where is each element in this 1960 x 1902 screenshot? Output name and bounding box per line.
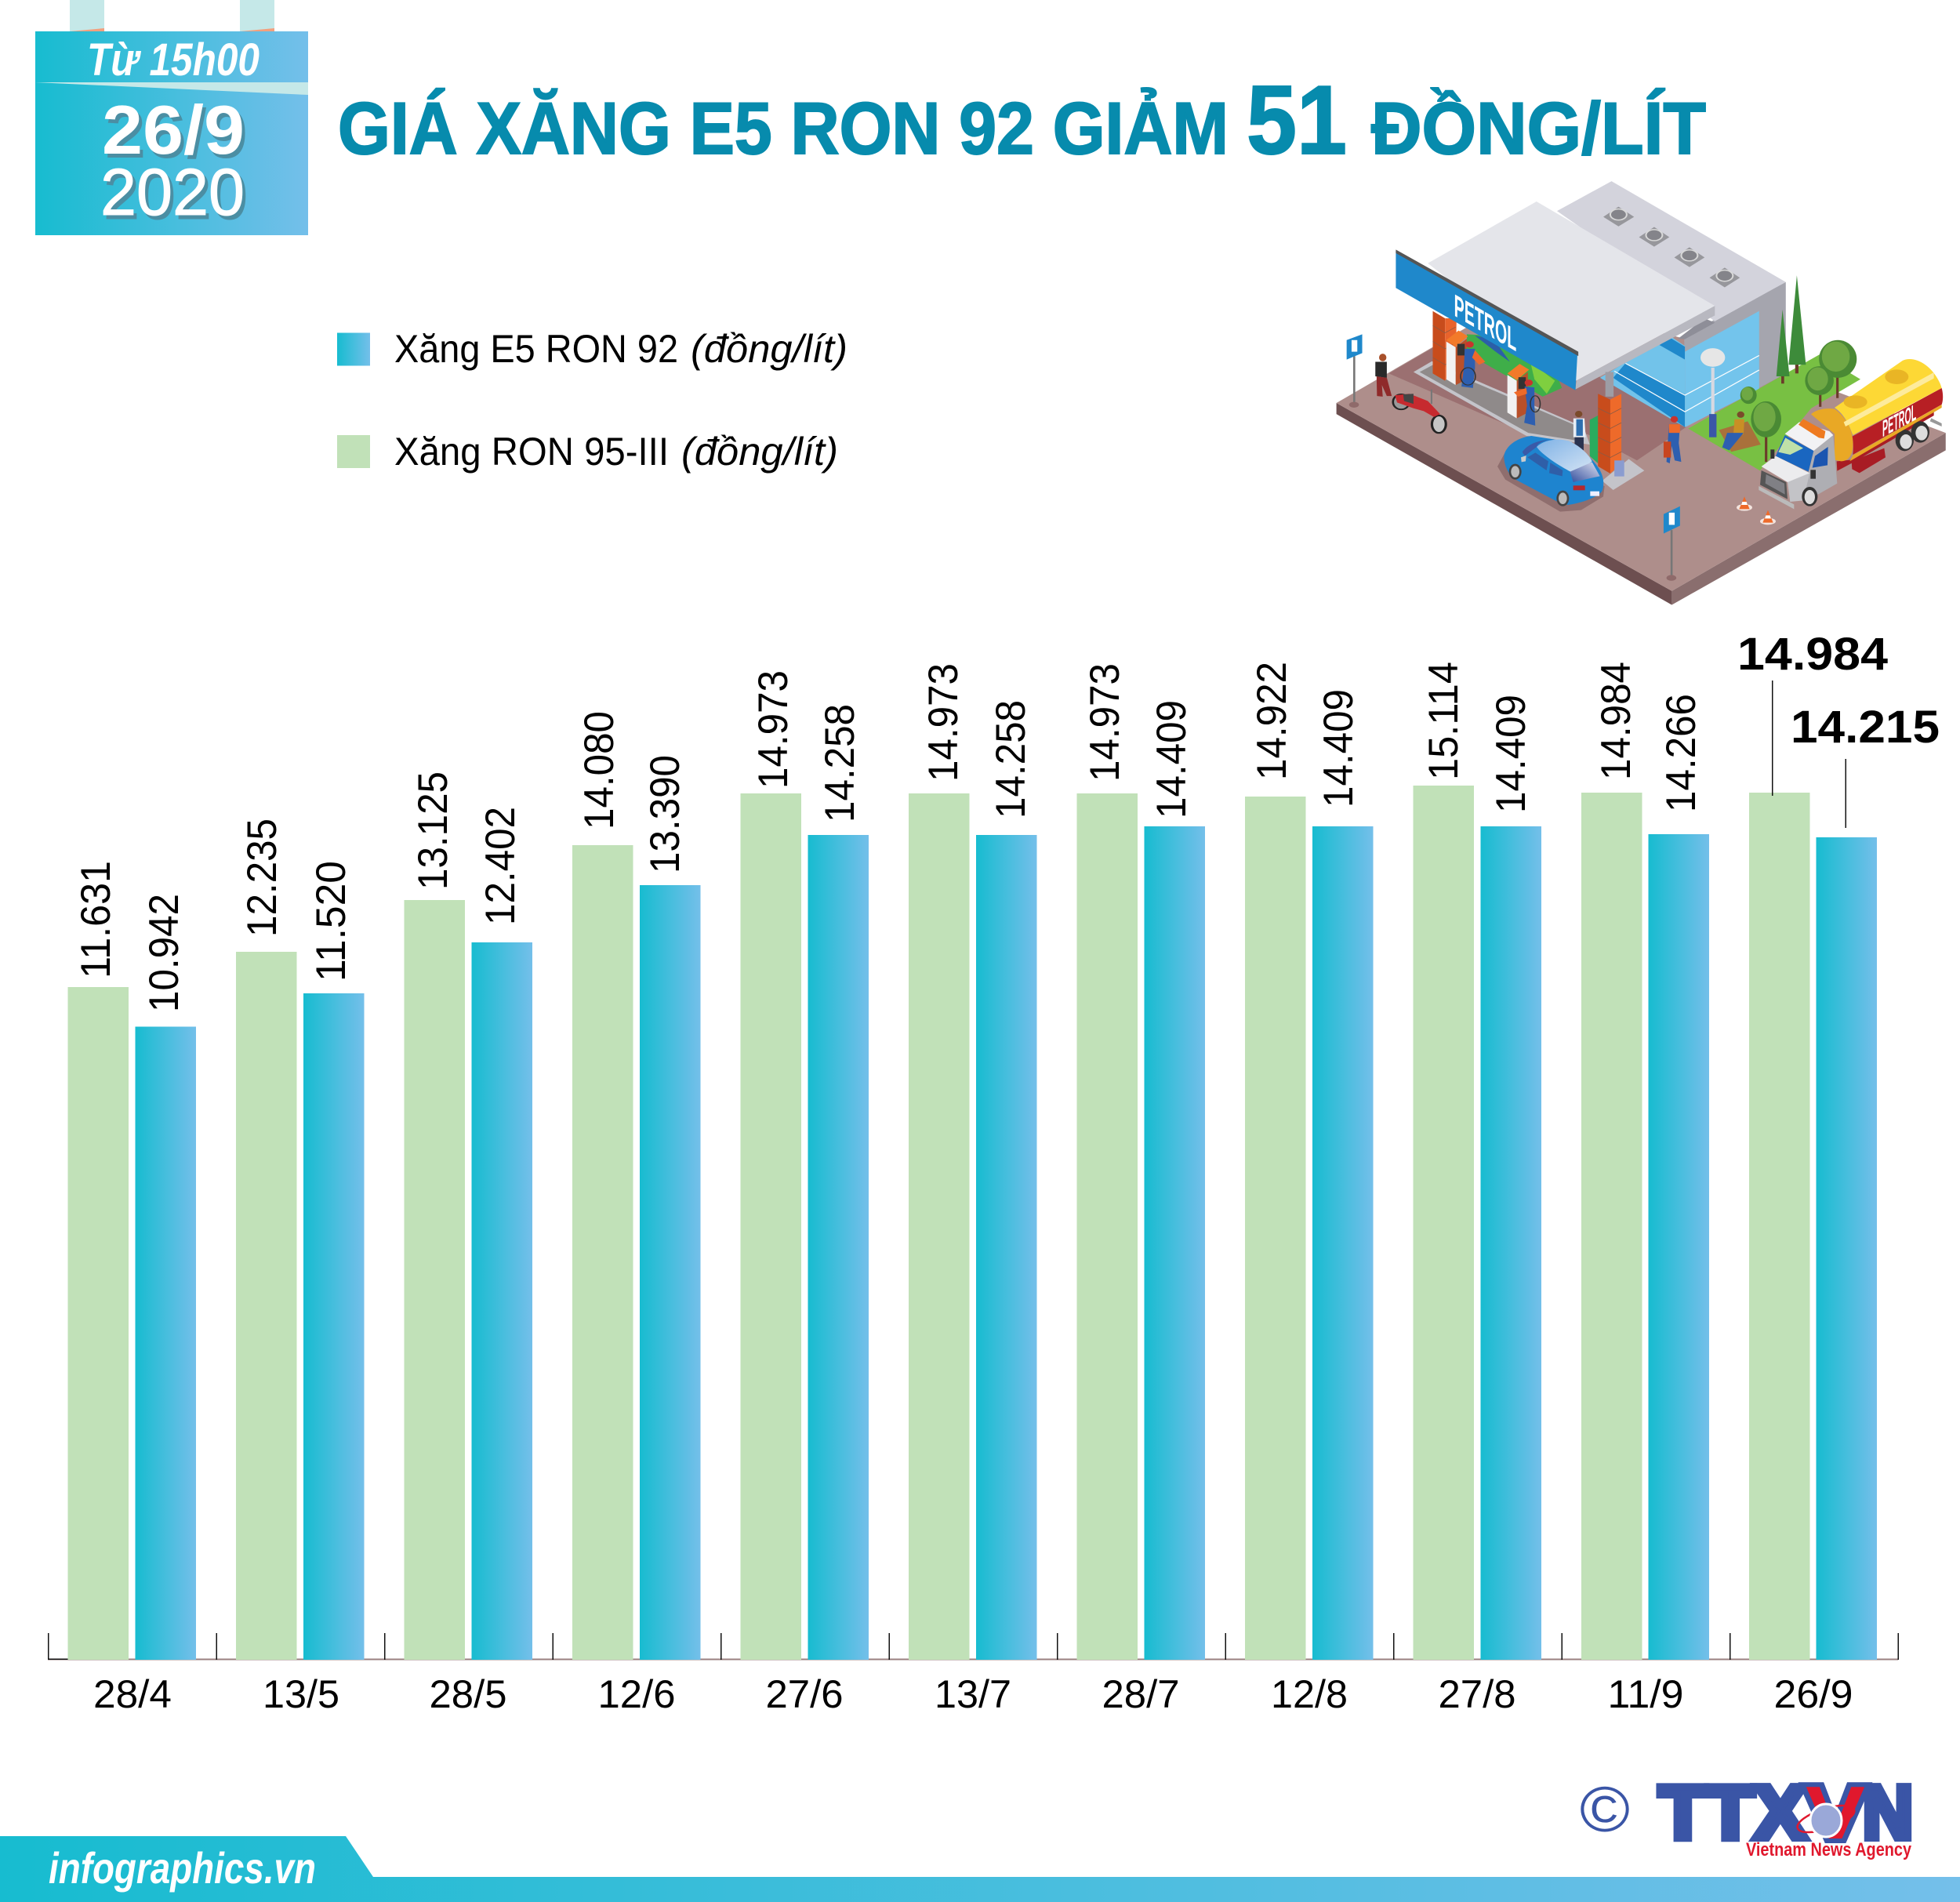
lawn	[1688, 354, 1860, 470]
logo: TTXVN: Vietnam News Agency	[1746, 1839, 1912, 1860]
date badge	[35, 0, 308, 235]
group 12/6	[572, 711, 701, 1716]
group 11/9: 11/9	[1607, 1672, 1684, 1716]
group 13/7	[909, 663, 1036, 1716]
fuel pump 2	[1508, 364, 1529, 419]
copyright symbol: ©	[1580, 1774, 1630, 1846]
group 12/8: 12/8	[1271, 1672, 1348, 1716]
group 28/7: 14.973	[1082, 663, 1128, 782]
group 12/6: 13.390	[642, 755, 688, 873]
title: ĐỒNG/LÍT	[1371, 87, 1706, 169]
person on bench	[1719, 412, 1761, 452]
footer band	[0, 1836, 1960, 1902]
chart axis	[48, 1633, 1899, 1661]
group 12/8: 14.409	[1316, 689, 1362, 808]
date badge: 2020	[100, 155, 245, 229]
group 11/9: 14.266	[1658, 694, 1704, 812]
pillar right	[1590, 372, 1624, 477]
building	[1557, 181, 1786, 427]
group 27/8: 14.409	[1488, 695, 1534, 813]
legend: (đồng/lít)	[691, 327, 848, 371]
group 28/5: 28/5	[430, 1672, 506, 1716]
group 28/5: 13.125	[410, 771, 456, 890]
callout: 14.215: 14.215	[1791, 702, 1940, 753]
trees	[1740, 275, 1857, 462]
canopy	[1396, 201, 1715, 390]
group 11/9	[1581, 662, 1709, 1716]
callout: 14.984: 14.984	[1737, 629, 1888, 680]
group 27/8: 15.114	[1421, 662, 1467, 780]
group 28/7: 14.409	[1149, 700, 1195, 819]
group 27/8	[1413, 662, 1541, 1716]
group 27/6: 27/6	[765, 1672, 844, 1716]
group 28/5	[405, 771, 532, 1716]
group 28/4	[67, 861, 196, 1716]
group 26/9: 26/9	[1773, 1672, 1853, 1716]
motorcycle	[1393, 390, 1446, 433]
group 28/4: 28/4	[93, 1672, 172, 1716]
logo: TTXVN: N	[1863, 1770, 1913, 1855]
fuel pump 1	[1446, 331, 1468, 385]
green car	[1467, 334, 1562, 397]
man beside car	[1573, 411, 1586, 450]
legend	[337, 327, 848, 474]
group 26/9	[1749, 793, 1877, 1716]
group 13/5	[236, 819, 364, 1716]
legend: Xăng E5 RON 92	[394, 327, 678, 371]
attendant 1	[1461, 341, 1485, 388]
group 13/7: 13/7	[935, 1672, 1011, 1716]
road sign left	[1347, 334, 1363, 408]
title	[338, 67, 1706, 175]
blue car	[1497, 436, 1605, 512]
group 12/8	[1245, 662, 1374, 1716]
group 12/8: 14.922	[1249, 662, 1295, 780]
group 13/7: 14.973	[920, 663, 967, 782]
group 28/5: 12.402	[477, 807, 524, 925]
footer text: infographics.vn	[49, 1843, 316, 1893]
group 28/7: 28/7	[1102, 1672, 1179, 1716]
canopy: PETROL	[1454, 288, 1516, 358]
group 27/6: 14.258	[817, 704, 863, 822]
illustration: petrol station	[1337, 181, 1946, 605]
platform	[1337, 295, 1946, 605]
attendant 2	[1514, 379, 1541, 426]
pillar left	[1432, 311, 1457, 381]
street lamp	[1700, 348, 1725, 437]
group 27/6: 14.973	[750, 670, 797, 789]
group 11/9: 14.984	[1593, 662, 1639, 780]
title: 51	[1247, 67, 1347, 175]
date badge: Từ 15h00	[87, 34, 260, 85]
biker	[1375, 354, 1392, 397]
walking attendant	[1664, 416, 1681, 463]
group 27/8: 27/8	[1438, 1672, 1516, 1716]
group 28/4: 11.631	[73, 861, 119, 978]
bar chart	[67, 662, 1877, 1716]
road sign front	[1664, 506, 1680, 581]
date badge: 26/9	[102, 91, 245, 169]
group 27/6	[740, 670, 869, 1716]
group 13/5: 12.235	[239, 819, 285, 937]
legend: (đồng/lít)	[681, 430, 838, 474]
group 12/6: 14.080	[576, 711, 622, 829]
forecourt island	[1414, 361, 1644, 490]
tanker truck	[1759, 359, 1943, 509]
legend: Xăng RON 95-III	[394, 430, 669, 474]
group 28/7	[1077, 663, 1205, 1716]
logo: TTXVN: TTX	[1659, 1770, 1806, 1855]
group 13/5: 11.520	[308, 861, 354, 982]
roof vents	[1603, 207, 1740, 287]
group 12/6: 12/6	[597, 1672, 676, 1716]
logo: TTXVN: V	[1806, 1771, 1865, 1855]
group 13/7: 14.258	[988, 700, 1034, 819]
group 28/4: 10.942	[141, 894, 187, 1012]
title: GIÁ XĂNG E5 RON 92 GIẢM	[338, 87, 1229, 169]
logo: TTXVN	[1659, 1770, 1913, 1860]
group 13/5: 13/5	[263, 1672, 339, 1716]
traffic cones	[1737, 496, 1776, 525]
